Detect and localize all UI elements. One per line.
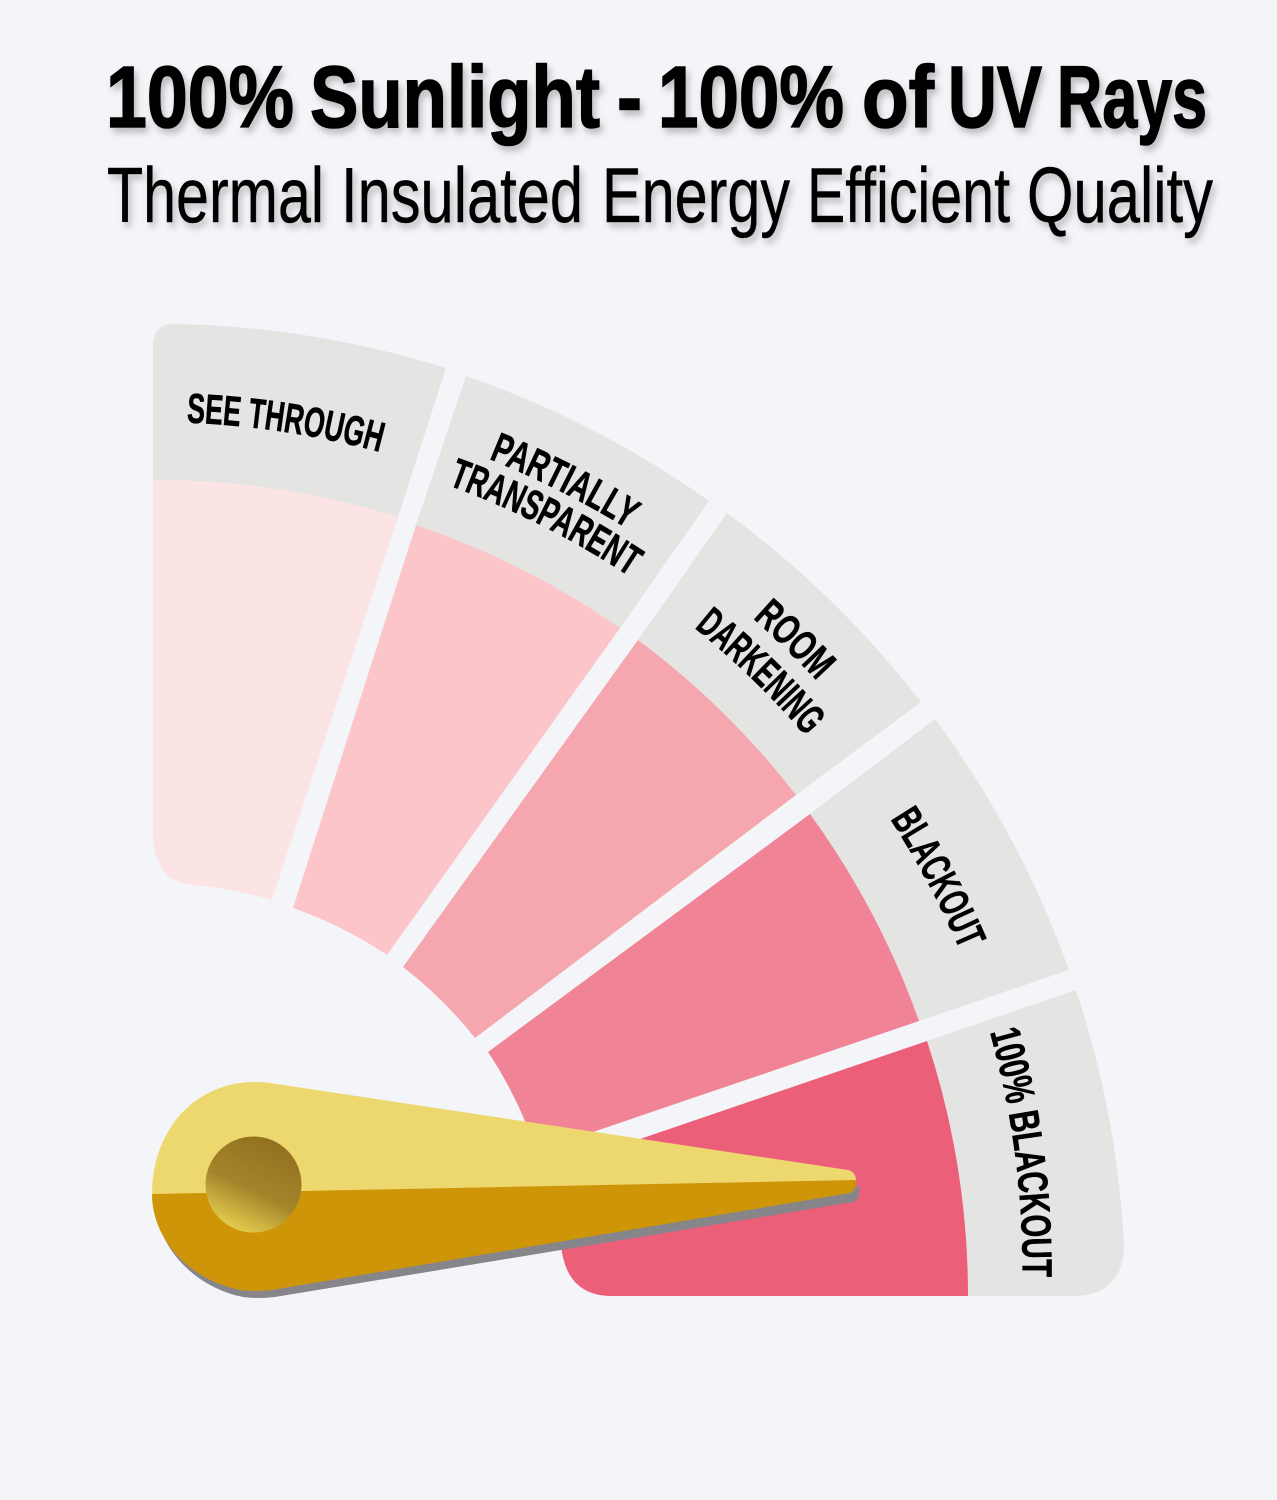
- title: 100%: [106, 49, 294, 146]
- title: [106, 49, 1207, 146]
- panel: blackout: [488, 719, 1069, 1132]
- title: Sunlight: [310, 49, 600, 146]
- icon: gold pointer needle: [152, 1082, 859, 1298]
- panel: see through: SEE THROUGH: [188, 393, 386, 452]
- panel: see through: [153, 324, 446, 900]
- panel: 100% blackout: 100% BLACKOUT: [990, 1027, 1052, 1277]
- panel: 100% blackout: [562, 990, 1124, 1296]
- title: 100%: [658, 49, 844, 146]
- title: Rays: [1057, 49, 1207, 146]
- panel: room darkening: ROOM: [754, 598, 837, 680]
- title: of: [862, 49, 935, 146]
- subtitle: Quality: [1027, 151, 1213, 239]
- subtitle: Insulated: [341, 151, 583, 239]
- title: UV: [948, 49, 1042, 146]
- title: -: [617, 49, 642, 146]
- icon: pivot hole: [206, 1136, 302, 1232]
- subtitle: Thermal: [107, 151, 324, 239]
- subtitle: [107, 151, 1213, 239]
- panel: room darkening: [403, 513, 921, 1038]
- panel: partially transparent: [293, 376, 709, 955]
- panel: partially transparent: TRANSPARENT: [454, 458, 646, 574]
- panel: partially transparent: PARTIALLY: [490, 432, 643, 526]
- subtitle: Efficient: [807, 151, 1010, 239]
- subtitle: Energy: [602, 151, 790, 239]
- panel: blackout: BLACKOUT: [890, 804, 987, 945]
- panel: room darkening: DARKENING: [695, 606, 824, 732]
